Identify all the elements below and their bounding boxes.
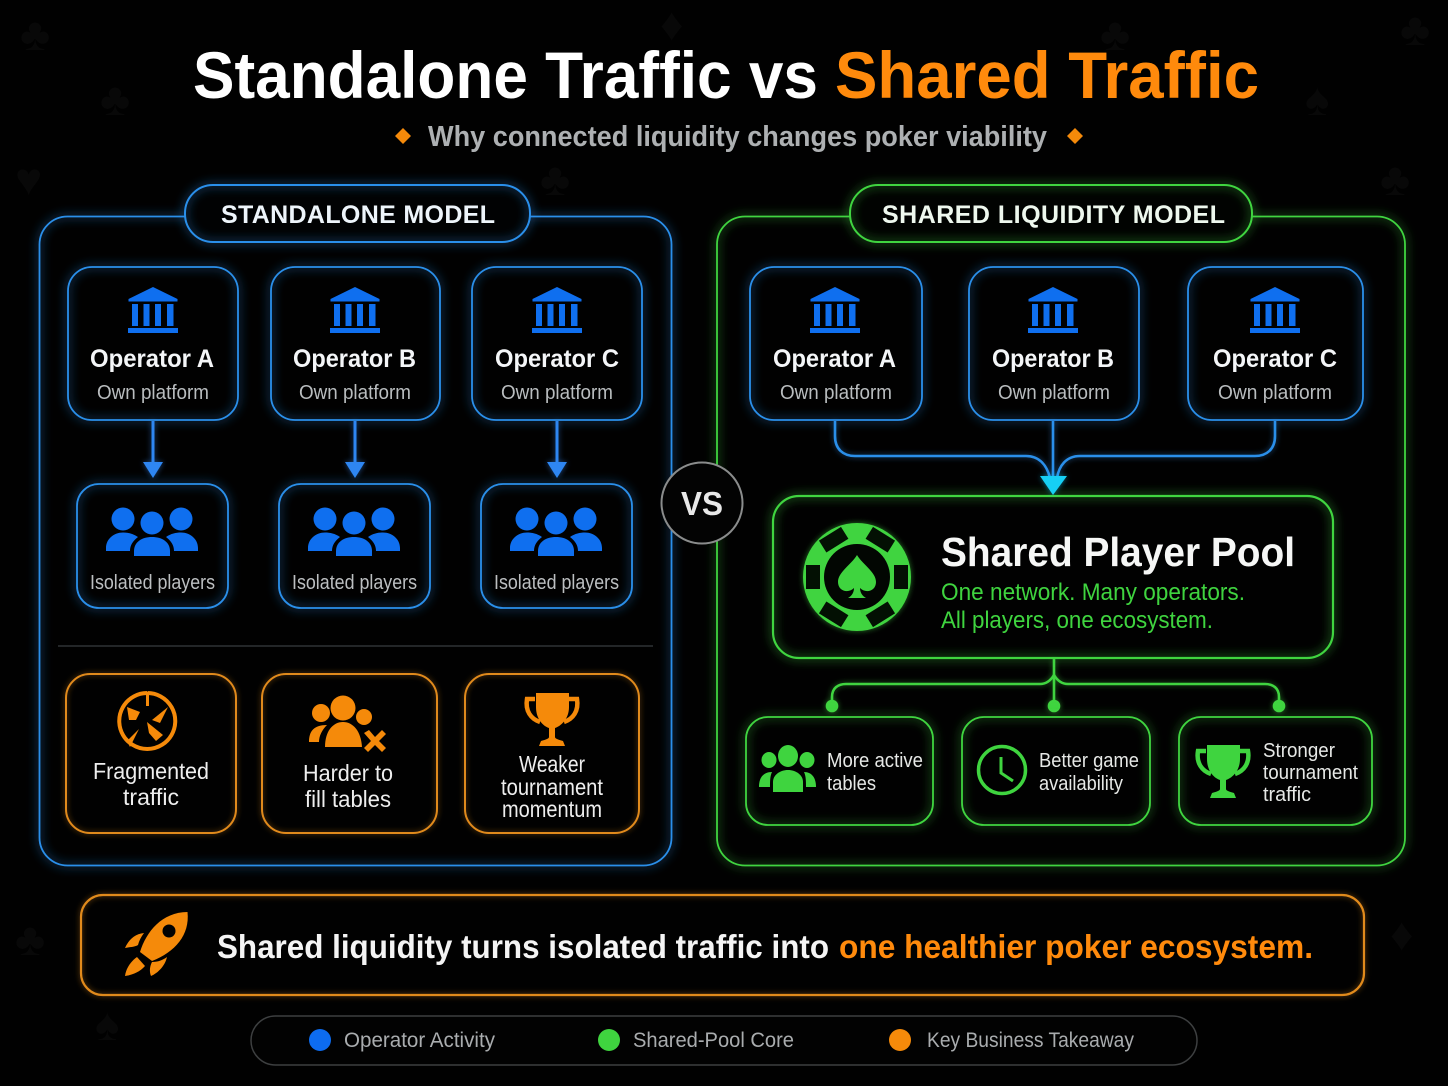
background suit pattern: ♣ — [20, 8, 50, 60]
banner: key takeaway — [81, 895, 1364, 995]
arrow: A to players — [143, 421, 163, 478]
title: Standalone Traffic vs — [193, 38, 818, 112]
card: fragmented traffic: traffic — [123, 784, 179, 810]
card: stronger tournament traffic: tournament — [1263, 762, 1358, 784]
legend item: operator activity: Operator Activity — [344, 1029, 495, 1052]
icon: rocket — [125, 912, 188, 976]
background suit pattern: ♣ — [1100, 8, 1130, 60]
background suit pattern: ♣ — [1400, 3, 1430, 55]
card: stronger tournament traffic — [1179, 717, 1372, 825]
arrow: into shared pool — [1040, 476, 1067, 495]
card: operator B: Own platform — [998, 382, 1110, 404]
background suit pattern: ♠ — [1305, 73, 1329, 125]
badge: shared liquidity model: SHARED LIQUIDITY MODEL — [882, 201, 1225, 229]
card: shared player pool: One network. Many operators. — [941, 579, 1245, 606]
card: isolated players C — [481, 484, 632, 608]
card: operator C — [1188, 267, 1363, 420]
panel: shared liquidity model — [717, 185, 1405, 866]
badge: standalone model: STANDALONE MODEL — [221, 201, 495, 229]
card: operator C: Operator C — [1213, 345, 1337, 373]
card: shared player pool: All players, one ecosystem. — [941, 607, 1213, 634]
card: operator A — [68, 267, 238, 420]
card: weaker tournament momentum — [465, 674, 639, 833]
title — [193, 38, 1259, 112]
card: isolated players C: Isolated players — [494, 572, 619, 594]
card: operator A — [750, 267, 922, 420]
legend item: key business takeaway: Key Business Takeaway — [927, 1029, 1134, 1052]
card: weaker tournament momentum: momentum — [502, 796, 602, 822]
card: operator C: Own platform — [1218, 382, 1332, 404]
card: more active tables: More active — [827, 750, 923, 772]
card: more active tables: tables — [827, 773, 876, 795]
card: isolated players B: Isolated players — [292, 572, 417, 594]
card: operator A: Own platform — [780, 382, 892, 404]
background suit pattern: ♠ — [95, 998, 119, 1050]
connector: tree to benefits — [827, 659, 1284, 711]
card: operator B: Operator B — [992, 345, 1114, 373]
subtitle: Why connected liquidity changes poker viability — [428, 121, 1047, 153]
card: better game availability: availability — [1039, 773, 1123, 795]
card: operator B — [271, 267, 440, 420]
legend — [251, 1016, 1197, 1065]
card: harder to fill tables — [262, 674, 437, 833]
card: shared player pool: Shared Player Pool — [941, 529, 1295, 575]
arrow: C to players — [547, 421, 567, 478]
card: operator A: Operator A — [90, 345, 214, 373]
icon: green people — [759, 745, 816, 792]
vs badge — [662, 462, 742, 544]
card: stronger tournament traffic: traffic — [1263, 784, 1311, 806]
card: weaker tournament momentum: Weaker — [519, 751, 585, 777]
card: operator B: Operator B — [293, 345, 416, 373]
background suit pattern: ♣ — [100, 73, 130, 125]
background suit pattern: ♣ — [15, 913, 45, 965]
card: operator C: Operator C — [495, 345, 619, 373]
card: fragmented traffic — [66, 674, 236, 833]
icon: people with cross — [309, 696, 386, 752]
icon: clock — [978, 746, 1026, 794]
icon: poker chip — [803, 523, 911, 631]
card: harder to fill tables: fill tables — [305, 786, 391, 812]
panel: standalone model — [40, 185, 672, 866]
card: operator B: Own platform — [299, 382, 411, 404]
icon: orange trophy — [527, 693, 577, 746]
legend item: shared-pool core: Shared-Pool Core — [633, 1029, 794, 1052]
card: stronger tournament traffic: Stronger — [1263, 740, 1335, 762]
card: isolated players A — [77, 484, 228, 608]
title: Shared Traffic — [835, 38, 1259, 112]
connector: operators to pool — [835, 421, 1275, 480]
card: operator B — [969, 267, 1139, 420]
card: operator A: Own platform — [97, 382, 209, 404]
background suit pattern: ♣ — [1380, 153, 1410, 205]
background suit pattern: ♥ — [15, 153, 42, 205]
background suit pattern: ♦ — [1390, 908, 1413, 960]
arrow: B to players — [345, 421, 365, 478]
card: better game availability: Better game — [1039, 750, 1139, 772]
card: operator C: Own platform — [501, 382, 613, 404]
banner: key takeaway: Shared liquidity turns isolated traffic into — [217, 928, 829, 965]
card: isolated players B — [279, 484, 430, 608]
card: operator C — [472, 267, 642, 420]
card: more active tables — [746, 717, 933, 825]
icon: green trophy — [1198, 745, 1248, 798]
badge: standalone model — [185, 185, 530, 242]
vs badge: VS — [681, 485, 723, 522]
card: fragmented traffic: Fragmented — [93, 758, 209, 784]
banner: key takeaway: one healthier poker ecosystem. — [839, 928, 1313, 965]
card: shared player pool — [773, 496, 1333, 658]
card: harder to fill tables: Harder to — [303, 760, 393, 786]
card: better game availability — [962, 717, 1150, 825]
badge: shared liquidity model — [850, 185, 1252, 242]
card: operator A: Operator A — [773, 345, 896, 373]
card: isolated players A: Isolated players — [90, 572, 215, 594]
icon: fragmented circle — [119, 692, 175, 749]
background suit pattern: ♣ — [540, 153, 570, 205]
card: weaker tournament momentum: tournament — [501, 774, 604, 800]
